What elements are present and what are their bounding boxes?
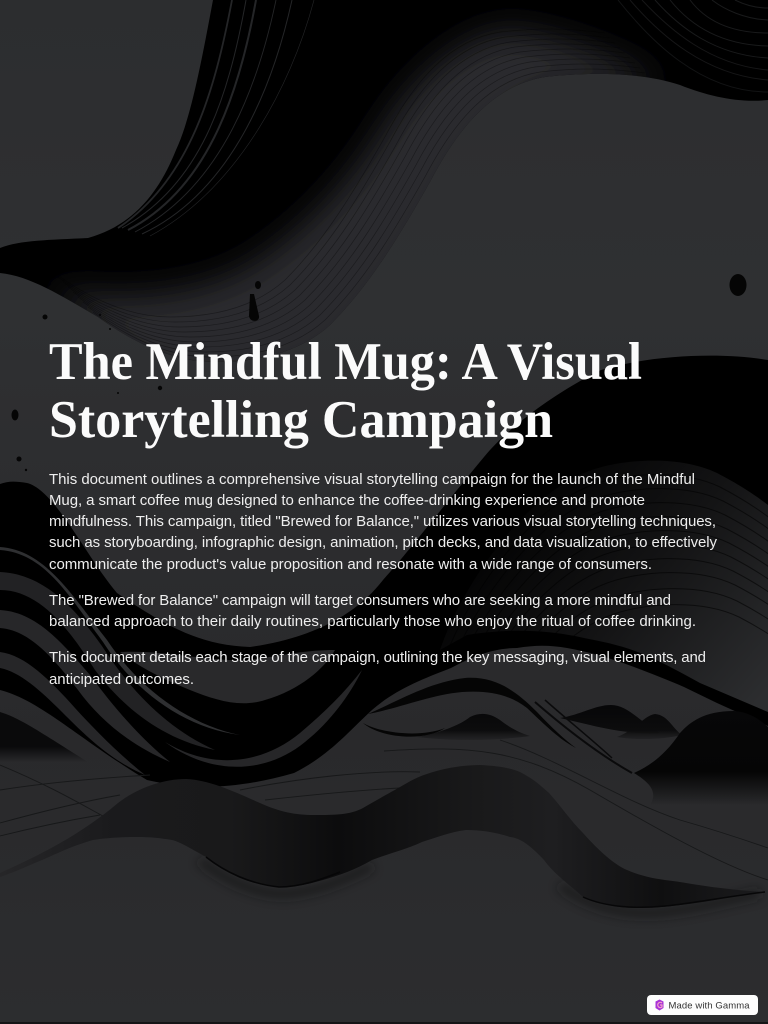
ink droplets [12, 274, 746, 471]
grey lens between ribbons [120, 650, 335, 703]
foreground dune [0, 765, 765, 913]
top black wave [0, 0, 768, 385]
closing paragraph: This document details each stage of the campaign, outlining the key messaging, visual elements, and [49, 649, 706, 666]
intro paragraph: Mug, a smart coffee mug designed to enhance the coffee-drinking experience and promote [49, 492, 645, 509]
ground contour lines [0, 740, 768, 880]
audience paragraph: The "Brewed for Balance" campaign will target consumers who are seeking a more mindful and [49, 592, 671, 609]
icon: gamma logo [656, 1000, 664, 1010]
distant hills [0, 678, 768, 805]
audience paragraph: balanced approach to their daily routines, particularly those who enjoy the ritual of coffee drinking. [49, 613, 696, 630]
intro paragraph: communicate the product's value proposition and resonate with a wide range of consumers. [49, 556, 652, 573]
made with gamma badge [647, 995, 758, 1015]
intro paragraph: mindfulness. This campaign, titled "Brewed for Balance," utilizes various visual storytelling techniques, [49, 513, 716, 530]
central black ribbons [0, 356, 768, 794]
title: The Mindful Mug: A Visual [49, 333, 642, 391]
closing paragraph: anticipated outcomes. [49, 671, 194, 688]
left grey stripes [0, 547, 362, 775]
bottom edge [0, 1022, 768, 1024]
intro paragraph: such as storyboarding, infographic design, animation, pitch decks, and data visualization, to effectively [49, 534, 718, 551]
title [49, 333, 642, 449]
audience paragraph [49, 592, 696, 630]
intro paragraph [49, 471, 718, 573]
title: Storytelling Campaign [49, 391, 553, 449]
intro paragraph: This document outlines a comprehensive visual storytelling campaign for the launch of the Mindful [49, 471, 695, 488]
closing paragraph [49, 649, 706, 688]
made with gamma badge: Made with Gamma [668, 1000, 750, 1012]
lit fine-line band on the right [454, 460, 768, 712]
